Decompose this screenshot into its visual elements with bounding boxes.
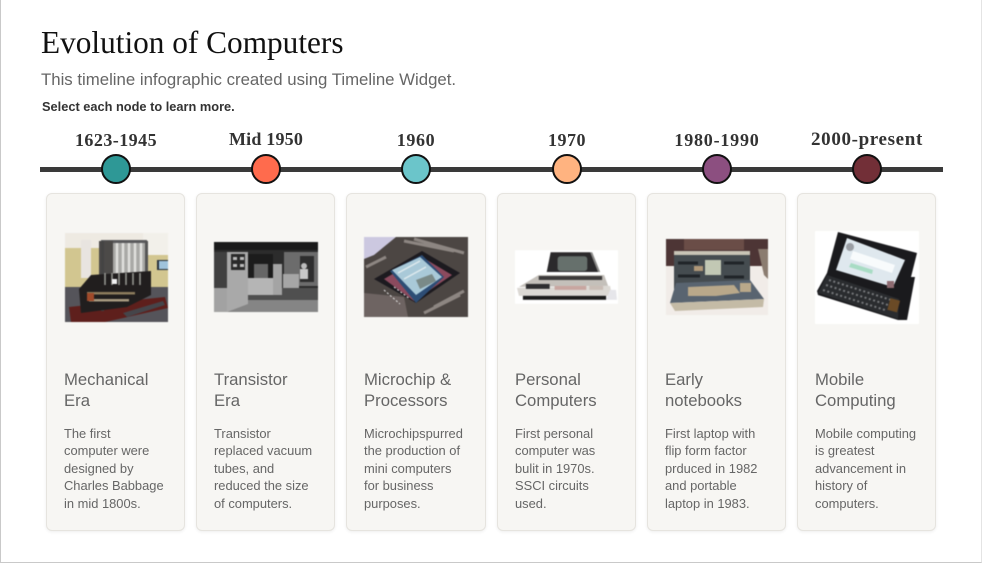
description: [515, 426, 595, 510]
heading: [515, 370, 597, 410]
description: [815, 426, 916, 510]
description: history of: [815, 478, 867, 493]
description: prduced in 1982: [665, 460, 757, 476]
heading: [815, 370, 896, 410]
heading: Era: [214, 391, 240, 410]
description: [64, 426, 164, 510]
date: 1960: 1960: [397, 130, 435, 150]
heading: Mechanical: [64, 370, 148, 389]
description: used.: [515, 496, 547, 510]
node 5: [702, 154, 732, 184]
description: is greatest: [815, 443, 874, 458]
heading: [364, 370, 451, 410]
panel: Transistor Era: [196, 193, 335, 531]
description: First laptop with: [665, 426, 755, 440]
description: reduced the size: [214, 478, 309, 493]
description: computers.: [815, 496, 879, 510]
heading: notebooks: [665, 391, 742, 410]
date: 1623-1945: 1623-1945: [75, 130, 157, 150]
description: advancement in: [815, 460, 906, 476]
image: personal computer: [516, 250, 618, 304]
panel: Early notebooks: [647, 193, 786, 531]
heading: [64, 370, 148, 410]
description: [665, 426, 757, 510]
node 4: [552, 154, 582, 184]
description: of computers.: [214, 496, 292, 510]
image: transistor computer room: [213, 241, 319, 313]
heading: Processors: [364, 391, 447, 410]
image: portable laptop: [665, 238, 769, 314]
description: Charles Babbage: [64, 478, 164, 493]
heading: Era: [64, 391, 90, 410]
image: mobile phone: [816, 232, 918, 324]
subtitle: This timeline infographic created using Timeline Widget.: [41, 70, 456, 89]
image: difference engine: [64, 233, 169, 323]
heading: [665, 370, 742, 410]
description: computer was: [515, 443, 595, 458]
description: in mid 1800s.: [64, 496, 141, 510]
description: [214, 426, 312, 510]
description: flip form factor: [665, 443, 747, 458]
heading: [214, 370, 288, 410]
node 3: [401, 154, 431, 184]
description: the production of: [364, 443, 460, 458]
instruction text: Select each node to learn more.: [42, 99, 235, 114]
timeline: [40, 129, 943, 184]
heading: Transistor: [214, 370, 288, 389]
description: Transistor: [214, 426, 271, 440]
description: SSCI circuits: [515, 478, 589, 493]
panel: Microchip & Processors: [346, 193, 486, 531]
title: Evolution of Computers: [41, 25, 344, 60]
description: First personal: [515, 426, 593, 440]
description: purposes.: [364, 496, 421, 510]
description: laptop in 1983.: [665, 496, 750, 510]
date: Mid 1950: Mid 1950: [229, 129, 303, 149]
node 1: [101, 154, 131, 184]
description: bulit in 1970s.: [515, 460, 595, 476]
heading: Microchip &: [364, 370, 451, 389]
description: for business: [364, 478, 434, 493]
description: and portable: [665, 478, 737, 493]
node 6: [852, 154, 882, 184]
description: computer were: [64, 443, 149, 458]
description: Microchipspurred: [364, 426, 463, 440]
description: replaced vacuum: [214, 443, 312, 458]
date: 2000-present: 2000-present: [811, 129, 923, 150]
date: 1970: 1970: [548, 130, 586, 150]
image: microchip: [363, 236, 469, 318]
description: designed by: [64, 460, 134, 476]
timeline bar: [40, 167, 943, 172]
description: Mobile computing: [815, 426, 916, 440]
description: mini computers: [364, 460, 451, 476]
heading: Early: [665, 370, 703, 389]
description: [364, 426, 463, 510]
heading: Computing: [815, 391, 896, 410]
heading: Mobile: [815, 370, 864, 389]
heading: Personal: [515, 370, 581, 389]
node 2: [251, 154, 281, 184]
description: The first: [64, 426, 111, 440]
panel: Personal Computers: [497, 193, 636, 531]
panel: Mechanical Era: [46, 193, 185, 531]
heading: Computers: [515, 391, 597, 410]
description: tubes, and: [214, 460, 274, 476]
panel: Mobile Computing: [797, 193, 936, 531]
date: 1980-1990: 1980-1990: [674, 130, 760, 150]
